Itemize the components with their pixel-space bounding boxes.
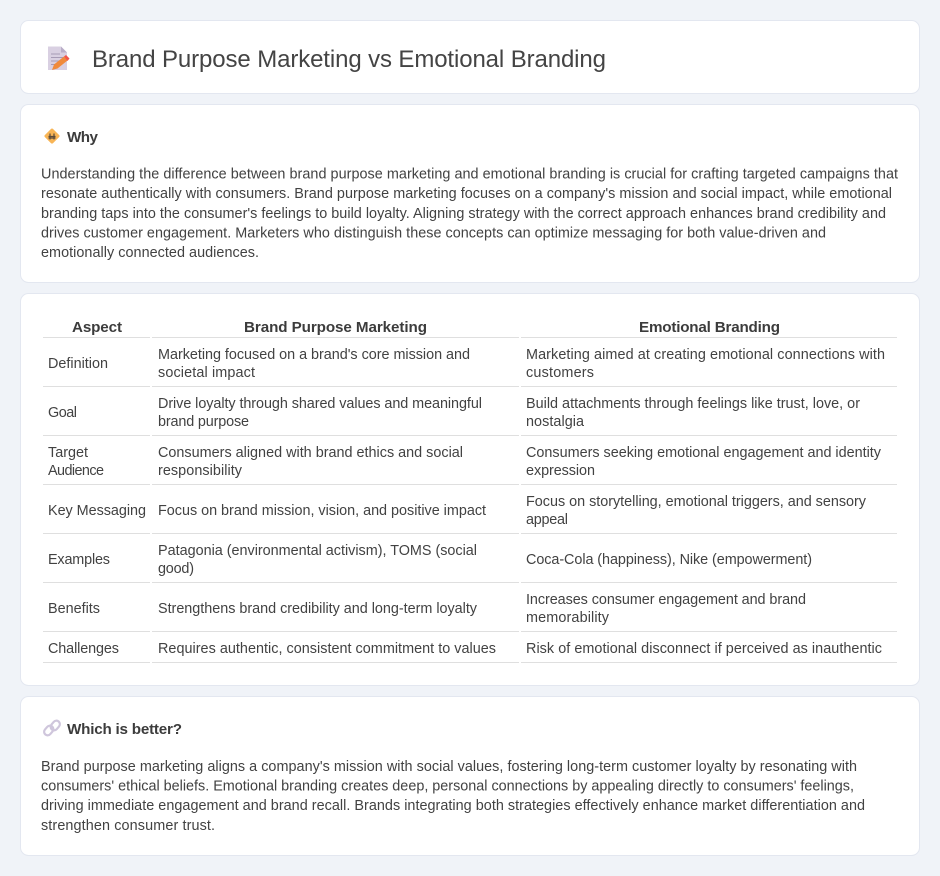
text block: which is better: driving immediate engagement and brand recall. Brands integrating both strategies effectively enhance market differentiation and xyxy=(41,798,865,814)
row: benefits: Strengthens brand credibility and long-term loyalty xyxy=(158,601,478,617)
row: challenges: Challenges xyxy=(48,641,119,657)
row: examples: Coca-Cola (happiness), Nike (empowerment) xyxy=(526,552,812,568)
text block: which is better xyxy=(41,759,865,834)
text block: why: Understanding the difference between brand purpose marketing and emotional branding is crucial for crafting targeted campaigns that xyxy=(41,167,898,183)
row: goal: Drive loyalty through shared values and meaningful xyxy=(158,396,482,412)
row: challenges: Risk of emotional disconnect if perceived as inauthentic xyxy=(526,641,882,657)
row: goal xyxy=(43,396,897,436)
row: benefits: memorability xyxy=(526,610,610,626)
text block: which is better: consumers' ethical beliefs. Emotional branding creates deep, personal connections by appealing directly to consumers' feelings, xyxy=(41,779,854,795)
text block: why: branding taps into the consumer's feelings to build loyalty. Aligning strategy with the correct approach enhances brand credibility and xyxy=(41,206,886,222)
row: definition: societal impact xyxy=(158,365,255,381)
row: examples: Patagonia (environmental activism), TOMS (social xyxy=(158,543,477,559)
row: target audience xyxy=(43,445,897,485)
text block: why: drives customer engagement. Marketers who distinguish these concepts can optimize messaging for both value-driven and xyxy=(41,225,826,241)
row: key messaging: Key Messaging xyxy=(48,503,146,519)
icon: document with pencil xyxy=(48,46,70,70)
icon: link xyxy=(43,719,61,737)
row: benefits: Increases consumer engagement and brand xyxy=(526,592,806,608)
panel: header xyxy=(20,20,920,94)
row: key messaging xyxy=(43,494,897,534)
row: goal: Goal xyxy=(48,405,77,421)
panel: which is better xyxy=(20,696,920,856)
row: target audience: Consumers seeking emotional engagement and identity xyxy=(526,445,882,461)
row: definition: Marketing focused on a brand's core mission and xyxy=(158,347,470,363)
heading: which is better: Which is better? xyxy=(67,721,182,738)
text block: why: resonate authentically with consumers. Brand purpose marketing focuses on a company's mission and social impact, while emotional xyxy=(41,186,892,202)
row: target audience: Audience xyxy=(48,463,104,479)
row: goal: Build attachments through feelings like trust, love, or xyxy=(526,396,860,412)
row: definition xyxy=(43,347,897,387)
title: Brand Purpose Marketing vs Emotional Branding xyxy=(92,46,606,73)
heading: why: Why xyxy=(67,129,99,146)
row: definition: customers xyxy=(526,365,594,381)
text block: which is better: strengthen consumer trust. xyxy=(41,818,215,834)
row: examples: Examples xyxy=(48,552,110,568)
row: goal: nostalgia xyxy=(526,414,584,430)
panel: comparison table xyxy=(20,294,920,686)
row: target audience: expression xyxy=(526,463,595,479)
table header row: Emotional Branding xyxy=(639,319,780,336)
row: target audience: responsibility xyxy=(158,463,243,479)
row: key messaging: Focus on brand mission, vision, and positive impact xyxy=(158,503,486,519)
row: benefits xyxy=(43,592,897,632)
row: target audience: Consumers aligned with brand ethics and social xyxy=(158,445,463,461)
table header row: Aspect xyxy=(72,319,122,336)
row: key messaging: Focus on storytelling, emotional triggers, and sensory xyxy=(526,494,867,510)
row: key messaging: appeal xyxy=(526,512,568,528)
row: definition: Definition xyxy=(48,356,108,372)
text block: why: emotionally connected audiences. xyxy=(41,245,259,261)
row: examples: good) xyxy=(158,561,194,577)
row: challenges: Requires authentic, consistent commitment to values xyxy=(158,641,496,657)
text block: why xyxy=(41,167,898,261)
row: examples xyxy=(43,543,897,583)
row: benefits: Benefits xyxy=(48,601,100,617)
panel: why xyxy=(20,104,920,282)
row: target audience: Target xyxy=(48,445,88,461)
row: goal: brand purpose xyxy=(158,414,249,430)
table header row: Brand Purpose Marketing xyxy=(244,319,427,336)
row: challenges xyxy=(43,641,897,663)
text block: which is better: Brand purpose marketing aligns a company's mission with social values, fostering long-term customer loyalty by resonating with xyxy=(41,759,857,775)
icon: warning diamond xyxy=(44,128,60,144)
row: definition: Marketing aimed at creating emotional connections with xyxy=(526,347,885,363)
table header row xyxy=(43,319,897,338)
